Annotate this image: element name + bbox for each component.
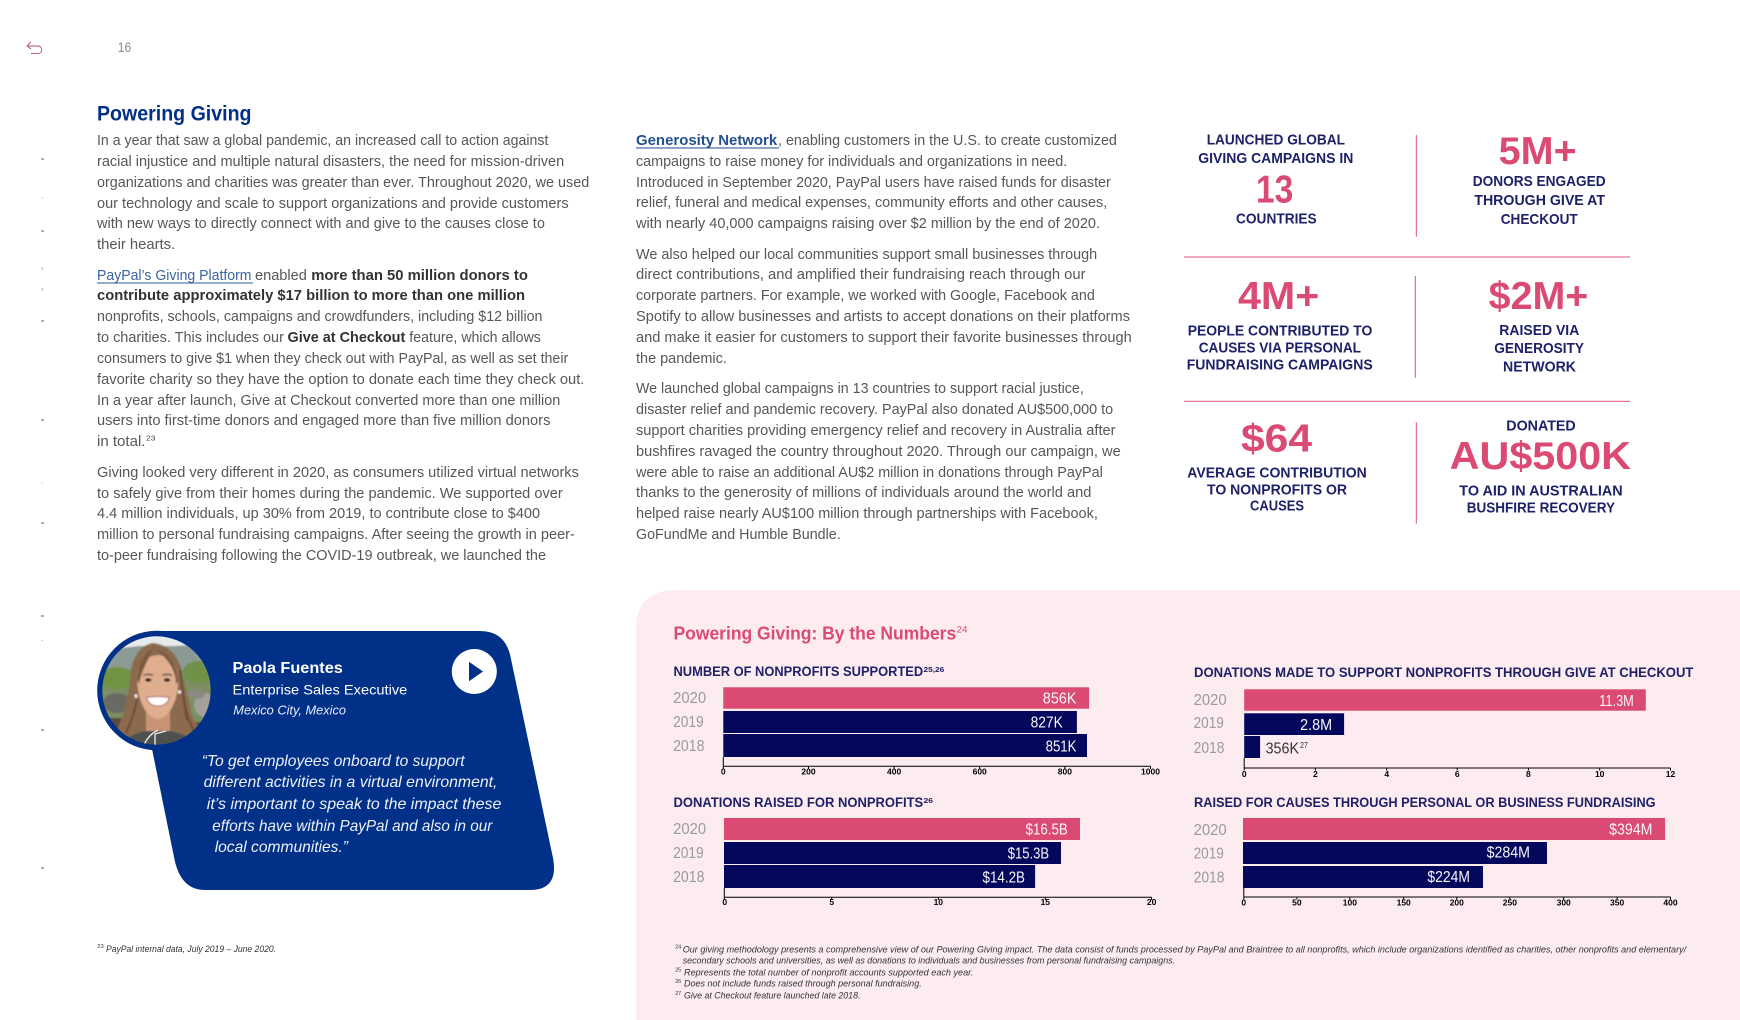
bar chart: donations through give at checkout: 11.3M bbox=[1599, 693, 1634, 710]
text block: left column: Giving looked very different in 2020, as consumers utilized virtual networks bbox=[97, 464, 579, 481]
employee name and role bbox=[232, 660, 408, 718]
text block: left column: contribute approximately $17 billion to more than one million bbox=[97, 287, 525, 304]
bar chart: number of nonprofits supported: 2020 bbox=[673, 690, 706, 707]
bar chart: donations raised for nonprofits: 2019 bbox=[673, 845, 704, 862]
stat: $64 average: AVERAGE CONTRIBUTION bbox=[1187, 464, 1367, 482]
bar chart: number of nonprofits supported: 0 bbox=[721, 766, 726, 776]
footnotes: by the numbers: Does not include funds raised through personal fundraising. bbox=[684, 979, 922, 990]
bar chart: raised through personal or business fundraising: $394M bbox=[1609, 822, 1652, 839]
heading: Powering Giving: Powering Giving bbox=[97, 103, 252, 126]
quote text bbox=[202, 753, 502, 856]
text block: middle column: We also helped our local communities support small businesses through bbox=[636, 246, 1097, 263]
footnotes: by the numbers: secondary schools and universities, as well as donations to individuals and businesses from personal fundraising campaigns. bbox=[683, 956, 1175, 966]
stat: $2M+ raised bbox=[1489, 275, 1588, 376]
bar chart: donations through give at checkout: 10 bbox=[1595, 769, 1605, 779]
stat: 13 countries: LAUNCHED GLOBAL bbox=[1207, 132, 1345, 148]
panel: by the numbers bbox=[636, 590, 1740, 1020]
bar chart: raised through personal or business fundraising: 400 bbox=[1663, 898, 1678, 908]
text block: left column: in total. bbox=[97, 433, 146, 450]
bar chart: donations raised for nonprofits: $15.3B bbox=[1008, 845, 1049, 862]
bar chart: raised through personal or business fundraising: 0 bbox=[1241, 898, 1246, 908]
stat: $64 average bbox=[1187, 418, 1367, 514]
stat: 5M+ donors: DONORS ENGAGED bbox=[1473, 173, 1606, 190]
photo: Paola Fuentes portrait bbox=[102, 636, 211, 745]
text block: left column bbox=[96, 132, 589, 564]
text block: left column: consumers to give $1 when they check out with PayPal, as well as set their bbox=[97, 350, 568, 367]
panel heading: 24 bbox=[956, 624, 968, 634]
text block: left column: racial injustice and multiple natural disasters, the need for mission-driven bbox=[97, 153, 564, 170]
footnotes: by the numbers: Our giving methodology presents a comprehensive view of our Powering Giving impact. The data consist of funds processed by PayPal and Braintree to all nonprofits, which include organizations identified as charities, other nonprofits and elementary/ bbox=[683, 944, 1687, 955]
footnotes: by the numbers: 26 bbox=[675, 979, 681, 985]
bar chart: donations raised for nonprofits: 20 bbox=[1147, 897, 1157, 907]
footnotes: by the numbers: 27 bbox=[675, 991, 681, 997]
text block: left column: Give at Checkout bbox=[288, 329, 405, 346]
bar chart: number of nonprofits supported: 851K bbox=[1046, 738, 1077, 755]
bar chart: raised through personal or business fundraising: 2020 bbox=[1194, 822, 1227, 839]
panel: employee quote card bbox=[97, 631, 554, 890]
text block: left column: their hearts. bbox=[97, 236, 175, 253]
bar chart: raised through personal or business fundraising: $284M bbox=[1487, 845, 1530, 862]
text block: middle column: direct contributions, and amplified their fundraising reach through our bbox=[636, 266, 1086, 283]
bar chart: number of nonprofits supported: 800 bbox=[1058, 766, 1072, 776]
bar chart: number of nonprofits supported: 2019 bbox=[673, 714, 704, 731]
stat: 4M+ people: FUNDRAISING CAMPAIGNS bbox=[1187, 356, 1373, 374]
text block: left column: nonprofits, schools, campaigns and crowdfunders, including $12 billion bbox=[97, 308, 542, 325]
bar chart: raised through personal or business fundraising: 300 bbox=[1557, 898, 1571, 908]
bar chart: donations through give at checkout: 2.8M bbox=[1300, 717, 1332, 734]
bar chart: raised through personal or business fundraising: $224M bbox=[1427, 869, 1470, 886]
bar chart: number of nonprofits supported: NUMBER OF NONPROFITS SUPPORTED bbox=[674, 664, 923, 679]
text block: left column: our technology and scale to support organizations and provide customers bbox=[97, 195, 569, 212]
bar chart: number of nonprofits supported bbox=[673, 664, 1160, 776]
bar chart: donations raised for nonprofits: 15 bbox=[1041, 897, 1050, 907]
stat: 13 countries bbox=[1198, 132, 1353, 228]
bar chart: donations raised for nonprofits: 2020 bbox=[673, 821, 706, 838]
text block: middle column: corporate partners. For example, we worked with Google, Facebook and bbox=[636, 287, 1095, 304]
text block: left column: with new ways to directly connect with and give to the causes close to bbox=[96, 215, 545, 232]
bar chart: raised through personal or business fundraising bbox=[1194, 795, 1678, 908]
quote text: “To get employees onboard to support bbox=[202, 753, 465, 770]
bar chart: donations through give at checkout bbox=[1194, 665, 1694, 779]
bar chart: donations raised for nonprofits: $16.5B bbox=[1026, 821, 1068, 838]
stat: $2M+ raised: GENEROSITY bbox=[1494, 340, 1584, 357]
employee name and role: Paola Fuentes bbox=[232, 660, 343, 677]
bar chart: donations raised for nonprofits: 0 bbox=[722, 897, 727, 907]
stat: 13 countries: COUNTRIES bbox=[1236, 210, 1317, 228]
bar chart: number of nonprofits supported: 2018 bbox=[673, 738, 704, 755]
bar chart: donations through give at checkout: 6 bbox=[1455, 769, 1460, 779]
bar chart: number of nonprofits supported: 400 bbox=[887, 766, 901, 776]
text block: middle column: and make it easier for customers to support their favorite businesses through bbox=[636, 329, 1132, 346]
quote text: different activities in a virtual environment, bbox=[204, 774, 497, 791]
stat: 5M+ donors: 5M+ bbox=[1499, 130, 1577, 173]
text block: middle column: Generosity Network bbox=[636, 132, 778, 149]
bar chart: donations raised for nonprofits: 5 bbox=[829, 897, 834, 907]
stat: $64 average: TO NONPROFITS OR bbox=[1207, 482, 1347, 498]
text block: middle column: campaigns to raise money for individuals and organizations in need. bbox=[636, 153, 1067, 170]
text block: left column: users into first-time donors and engaged more than five million donors bbox=[97, 412, 550, 429]
bar chart: number of nonprofits supported: 856K bbox=[1043, 690, 1077, 707]
text block: middle column: were able to raise an additional AU$2 million in donations through PayPal bbox=[635, 464, 1103, 481]
text block: left column: In a year that saw a global pandemic, an increased call to action against bbox=[97, 132, 549, 149]
stat: $2M+ raised: RAISED VIA bbox=[1499, 322, 1579, 339]
bar chart: donations through give at checkout: 2020 bbox=[1194, 692, 1227, 709]
stat: 5M+ donors: CHECKOUT bbox=[1501, 211, 1578, 228]
footnotes: by the numbers: Give at Checkout feature launched late 2018. bbox=[684, 991, 860, 1002]
icon: play button bbox=[452, 649, 497, 694]
text block: middle column: support charities providing emergency relief and recovery in Australia after bbox=[636, 422, 1116, 439]
stat: AU$500K donated: AU$500K bbox=[1450, 435, 1631, 478]
bar chart: raised through personal or business fundraising: 2018 bbox=[1194, 870, 1225, 886]
bar chart: donations raised for nonprofits: 2018 bbox=[673, 869, 704, 886]
footnotes: by the numbers: 24 bbox=[675, 944, 681, 950]
text block: left column: million to personal fundraising campaigns. After seeing the growth in peer- bbox=[97, 526, 575, 543]
bar chart: donations through give at checkout: DONATIONS MADE TO SUPPORT NONPROFITS THROUGH GIVE AT CHECKOUT bbox=[1194, 665, 1694, 680]
bar chart: donations raised for nonprofits: DONATIONS RAISED FOR NONPROFITS bbox=[674, 795, 923, 810]
bar chart: donations raised for nonprofits: 10 bbox=[934, 897, 943, 907]
stat: 4M+ people: PEOPLE CONTRIBUTED TO bbox=[1188, 322, 1373, 340]
text block: left column: PayPal’s Giving Platform bbox=[97, 267, 252, 284]
bar chart: donations raised for nonprofits: 26 bbox=[924, 796, 933, 805]
text block: left column: to charities. This includes our bbox=[97, 329, 284, 346]
text block: middle column: relief, funeral and medical expenses, community efforts and other causes, bbox=[636, 194, 1107, 211]
bar chart: donations through give at checkout: 0 bbox=[1242, 769, 1247, 779]
bar chart: donations through give at checkout: 356K bbox=[1266, 740, 1299, 757]
text block: middle column: GoFundMe and Humble Bundle. bbox=[636, 526, 841, 543]
text block: left column: to-peer fundraising following the COVID-19 outbreak, we launched the bbox=[97, 547, 546, 564]
bar chart: raised through personal or business fundraising: 250 bbox=[1503, 898, 1517, 908]
bar chart: number of nonprofits supported: 600 bbox=[973, 766, 987, 776]
footnote: left column: PayPal internal data, July 2019 – June 2020. bbox=[106, 944, 276, 955]
icon: back arrow bbox=[27, 42, 42, 54]
bar chart: donations through give at checkout: 4 bbox=[1384, 769, 1389, 779]
text block: middle column: , enabling customers in the U.S. to create customized bbox=[778, 132, 1117, 149]
bar chart: donations through give at checkout: 8 bbox=[1526, 769, 1531, 779]
bar chart: donations through give at checkout: 2 bbox=[1313, 769, 1318, 779]
bar chart: donations raised for nonprofits bbox=[673, 795, 1157, 907]
panel heading: Powering Giving: By the Numbers bbox=[674, 623, 956, 643]
bar chart: raised through personal or business fundraising: 50 bbox=[1292, 898, 1302, 908]
text block: left column: enabled bbox=[255, 267, 307, 284]
text block: middle column: the pandemic. bbox=[636, 350, 727, 367]
stat: $2M+ raised: NETWORK bbox=[1503, 358, 1576, 376]
bar chart: donations through give at checkout: 12 bbox=[1666, 769, 1675, 779]
stat: AU$500K donated: BUSHFIRE RECOVERY bbox=[1467, 500, 1615, 516]
bar chart: number of nonprofits supported: 200 bbox=[801, 766, 816, 776]
footnotes: by the numbers: 25 bbox=[675, 968, 681, 974]
stat: 4M+ people: 4M+ bbox=[1238, 275, 1319, 318]
text block: middle column: We launched global campaigns in 13 countries to support racial justice, bbox=[636, 380, 1084, 397]
bar chart: donations through give at checkout: 2019 bbox=[1194, 715, 1224, 732]
text block: middle column: with nearly 40,000 campaigns raising over $2 million by the end of 2020. bbox=[635, 215, 1100, 232]
stat: 13 countries: GIVING CAMPAIGNS IN bbox=[1198, 150, 1353, 167]
bar chart: raised through personal or business fundraising: 100 bbox=[1343, 898, 1357, 908]
stat: $64 average: CAUSES bbox=[1250, 498, 1304, 514]
text block: left column: favorite charity so they have the option to donate each time they check out. bbox=[97, 371, 584, 388]
employee name and role: Mexico City, Mexico bbox=[233, 704, 346, 718]
text block: middle column: disaster relief and pandemic recovery. PayPal also donated AU$500,000 to bbox=[636, 401, 1113, 418]
text block: middle column: thanks to the generosity of millions of individuals around the world and bbox=[636, 484, 1091, 501]
footnote: left column: 23 bbox=[97, 944, 104, 950]
bar chart: number of nonprofits supported: 25,26 bbox=[924, 665, 944, 674]
stat: 5M+ donors bbox=[1473, 130, 1606, 228]
text block: middle column: helped raise nearly AU$100 million through partnerships with Facebook, bbox=[636, 505, 1098, 522]
bar chart: raised through personal or business fundraising: 350 bbox=[1610, 898, 1624, 908]
stat: 5M+ donors: THROUGH GIVE AT bbox=[1474, 192, 1605, 209]
employee name and role: Enterprise Sales Executive bbox=[232, 681, 408, 697]
text block: left column: more than 50 million donors to bbox=[311, 267, 528, 284]
text block: left column: organizations and charities was greater than ever. Throughout 2020, we used bbox=[97, 174, 589, 191]
text block: left column: 23 bbox=[146, 434, 155, 442]
footnotes: by the numbers: Represents the total number of nonprofit accounts supported each year. bbox=[684, 967, 973, 978]
bar chart: number of nonprofits supported: 827K bbox=[1031, 714, 1063, 731]
text block: middle column: Introduced in September 2020, PayPal users have raised funds for disaster bbox=[636, 174, 1111, 191]
bar chart: number of nonprofits supported: 1000 bbox=[1141, 766, 1160, 776]
stat: AU$500K donated bbox=[1450, 418, 1631, 516]
bar chart: donations raised for nonprofits: $14.2B bbox=[982, 869, 1025, 886]
bar chart: donations through give at checkout: 27 bbox=[1300, 741, 1308, 750]
text block: left column: feature, which allows bbox=[409, 329, 541, 346]
quote text: local communities.” bbox=[215, 839, 349, 856]
bar chart: donations through give at checkout: 2018 bbox=[1194, 740, 1225, 757]
bar chart: raised through personal or business fundraising: 2019 bbox=[1194, 846, 1224, 862]
text block: middle column bbox=[635, 132, 1132, 543]
stat: AU$500K donated: DONATED bbox=[1506, 418, 1576, 434]
text block: middle column: Spotify to allow businesses and artists to accept donations on their platforms bbox=[636, 308, 1130, 325]
stat: $2M+ raised: $2M+ bbox=[1489, 275, 1588, 318]
text block: left column: to safely give from their homes during the pandemic. We supported over bbox=[97, 485, 563, 502]
text block: left column: 4.4 million individuals, up 30% from 2019, to contribute close to $400 bbox=[97, 505, 540, 522]
bar chart: raised through personal or business fundraising: 200 bbox=[1450, 898, 1464, 908]
text block: left column: In a year after launch, Give at Checkout converted more than one million bbox=[97, 392, 560, 409]
stat: 4M+ people bbox=[1187, 275, 1373, 374]
stat: 13 countries: 13 bbox=[1256, 168, 1293, 211]
quote text: it’s important to speak to the impact these bbox=[207, 796, 502, 813]
text block: middle column: bushfires ravaged the country throughout 2020. Through our campaign, we bbox=[636, 443, 1121, 460]
page number: 16 bbox=[118, 39, 131, 55]
bar chart: raised through personal or business fundraising: 150 bbox=[1397, 898, 1411, 908]
stat: 4M+ people: CAUSES VIA PERSONAL bbox=[1199, 340, 1361, 356]
bar chart: raised through personal or business fundraising: RAISED FOR CAUSES THROUGH PERSONAL OR BUSINESS FUNDRAISING bbox=[1194, 795, 1656, 810]
stat: $64 average: $64 bbox=[1241, 418, 1312, 461]
stat: AU$500K donated: TO AID IN AUSTRALIAN bbox=[1459, 482, 1623, 500]
quote text: efforts have within PayPal and also in our bbox=[212, 818, 493, 835]
panel: key statistics grid bbox=[1184, 130, 1631, 524]
footnotes: by the numbers bbox=[675, 944, 1687, 1002]
